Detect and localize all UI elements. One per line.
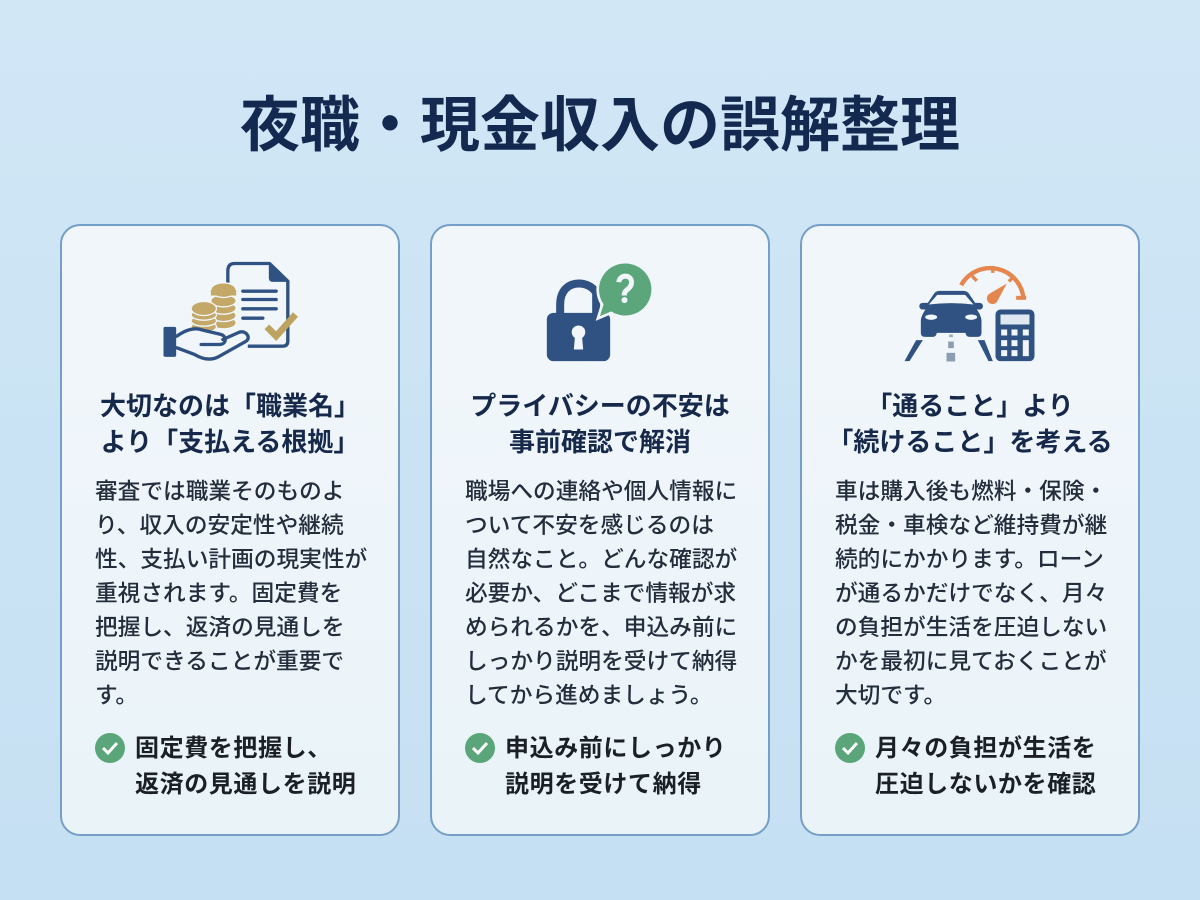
body text: 大切です。 (835, 682, 946, 708)
checkpoint (465, 733, 726, 798)
heading: プライバシーの不安は (470, 391, 730, 421)
body text: す。 (95, 682, 138, 708)
body text: 性、支払い計画の現実性が (95, 546, 367, 572)
checkpoint: 固定費を把握し、 (135, 735, 332, 762)
body text (95, 478, 367, 708)
body text: り、収入の安定性や継続 (95, 512, 344, 538)
body text: ついて不安を感じるのは (465, 512, 714, 538)
body text (465, 478, 737, 708)
body text: の負担が生活を圧迫しない (835, 614, 1107, 640)
body text: められるかを、申込み前に (465, 614, 737, 640)
body text: 重視されます。固定費を (95, 580, 342, 606)
icon: padlock with question bubble (546, 264, 652, 362)
body text (835, 478, 1107, 708)
panel: sustainable repayment (800, 224, 1140, 836)
heading (470, 391, 730, 457)
checkpoint (95, 733, 356, 798)
body text: かを最初に見ておくことが (835, 648, 1107, 674)
body text: 職場への連絡や個人情報に (465, 478, 737, 504)
body text: 続的にかかります。ローン (835, 546, 1104, 572)
body text: 把握し、返済の見通しを (95, 614, 345, 640)
body text: 税金・車検など維持費が継 (835, 512, 1107, 538)
body text: 車は購入後も燃料・保険・ (835, 478, 1107, 504)
body text: 審査では職業そのものよ (95, 478, 345, 504)
checkpoint (835, 733, 1096, 798)
panel: occupation vs. ability to pay (60, 224, 400, 836)
checkpoint: 説明を受けて納得 (505, 771, 702, 798)
heading (100, 391, 360, 457)
icon: car, speedometer and calculator (904, 266, 1034, 362)
checkpoint: 返済の見通しを説明 (135, 771, 356, 798)
heading: 「通ること」より (866, 391, 1074, 421)
checkpoint: 月々の負担が生活を (875, 735, 1096, 762)
body text: が通るかだけでなく、月々 (835, 580, 1107, 606)
heading: より「支払える根拠」 (101, 427, 359, 457)
checkpoint: 圧迫しないかを確認 (875, 771, 1096, 798)
heading: 事前確認で解消 (509, 427, 691, 457)
heading: 「続けること」を考える (827, 427, 1113, 457)
title: 夜職・現金収入の誤解整理 (240, 92, 960, 159)
body text: 説明できることが重要で (95, 648, 344, 674)
body text: 必要か、どこまで情報が求 (465, 580, 736, 606)
heading: 大切なのは「職業名」 (100, 391, 360, 421)
body text: 自然なこと。どんな確認が (465, 546, 737, 572)
panel: privacy concerns (430, 224, 770, 836)
checkpoint: 申込み前にしっかり (505, 735, 726, 762)
body text: してから進めましょう。 (465, 682, 713, 708)
body text: しっかり説明を受けて納得 (465, 648, 737, 674)
icon: hand holding coins with document (164, 262, 298, 361)
heading (827, 391, 1113, 457)
